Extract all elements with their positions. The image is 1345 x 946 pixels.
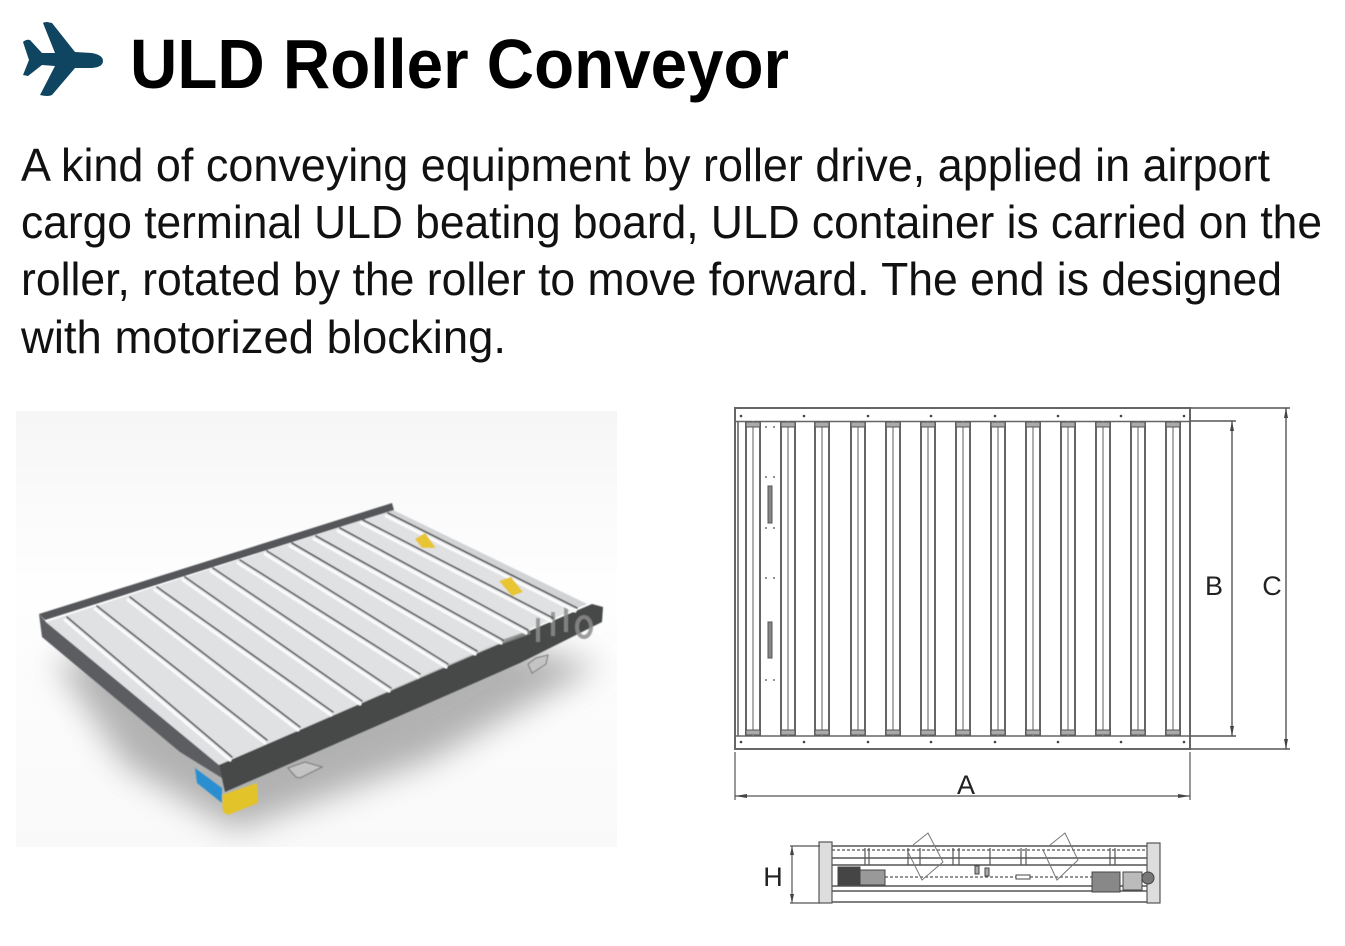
yellow blocker 2	[499, 577, 523, 596]
dimension C: C	[1262, 571, 1282, 601]
description text	[20, 139, 1322, 363]
ground shadow	[55, 620, 600, 830]
blue actuator	[195, 768, 222, 803]
dimension B: B	[1205, 571, 1223, 601]
sensor bar upper	[768, 486, 772, 523]
photo backdrop	[16, 411, 617, 847]
outer frame	[735, 408, 1190, 749]
description text: roller, rotated by the roller to move forward. The end is designed	[21, 253, 1282, 305]
bracket rear	[528, 655, 548, 673]
panel: side view technical drawing	[763, 833, 1160, 903]
dimension B	[1190, 421, 1236, 736]
description text: A kind of conveying equipment by roller drive, applied in airport	[21, 139, 1270, 191]
dimension H	[763, 846, 820, 903]
sensor bar lower	[768, 622, 772, 658]
description text: with motorized blocking.	[20, 311, 506, 363]
yellow support block	[222, 783, 258, 815]
watermark traces on beam	[502, 606, 591, 642]
panel: top view technical drawing	[735, 408, 1290, 800]
mounting dots	[740, 415, 1185, 743]
deck	[46, 510, 587, 765]
side beam	[39, 614, 222, 778]
dimension A: A	[957, 770, 975, 800]
dimension H: H	[763, 862, 783, 892]
bracket front	[288, 762, 322, 778]
roller seams	[65, 513, 577, 760]
dimension C	[1190, 408, 1290, 749]
dimension A	[735, 752, 1190, 800]
front beam	[219, 604, 603, 792]
icon: airplane	[23, 22, 103, 96]
panel: product photo of roller conveyor	[16, 411, 617, 847]
end blocks and frame	[819, 842, 1160, 903]
description text: cargo terminal ULD beating board, ULD container is carried on the	[21, 196, 1322, 248]
blocker arms	[907, 833, 1078, 880]
right edge strip	[388, 510, 587, 608]
rollers	[746, 421, 1180, 736]
title: ULD Roller Conveyor	[130, 25, 789, 103]
conveyor body	[39, 503, 603, 815]
yellow blocker 1	[415, 533, 436, 548]
motor assemblies	[838, 866, 1154, 892]
rear rail	[39, 503, 394, 620]
